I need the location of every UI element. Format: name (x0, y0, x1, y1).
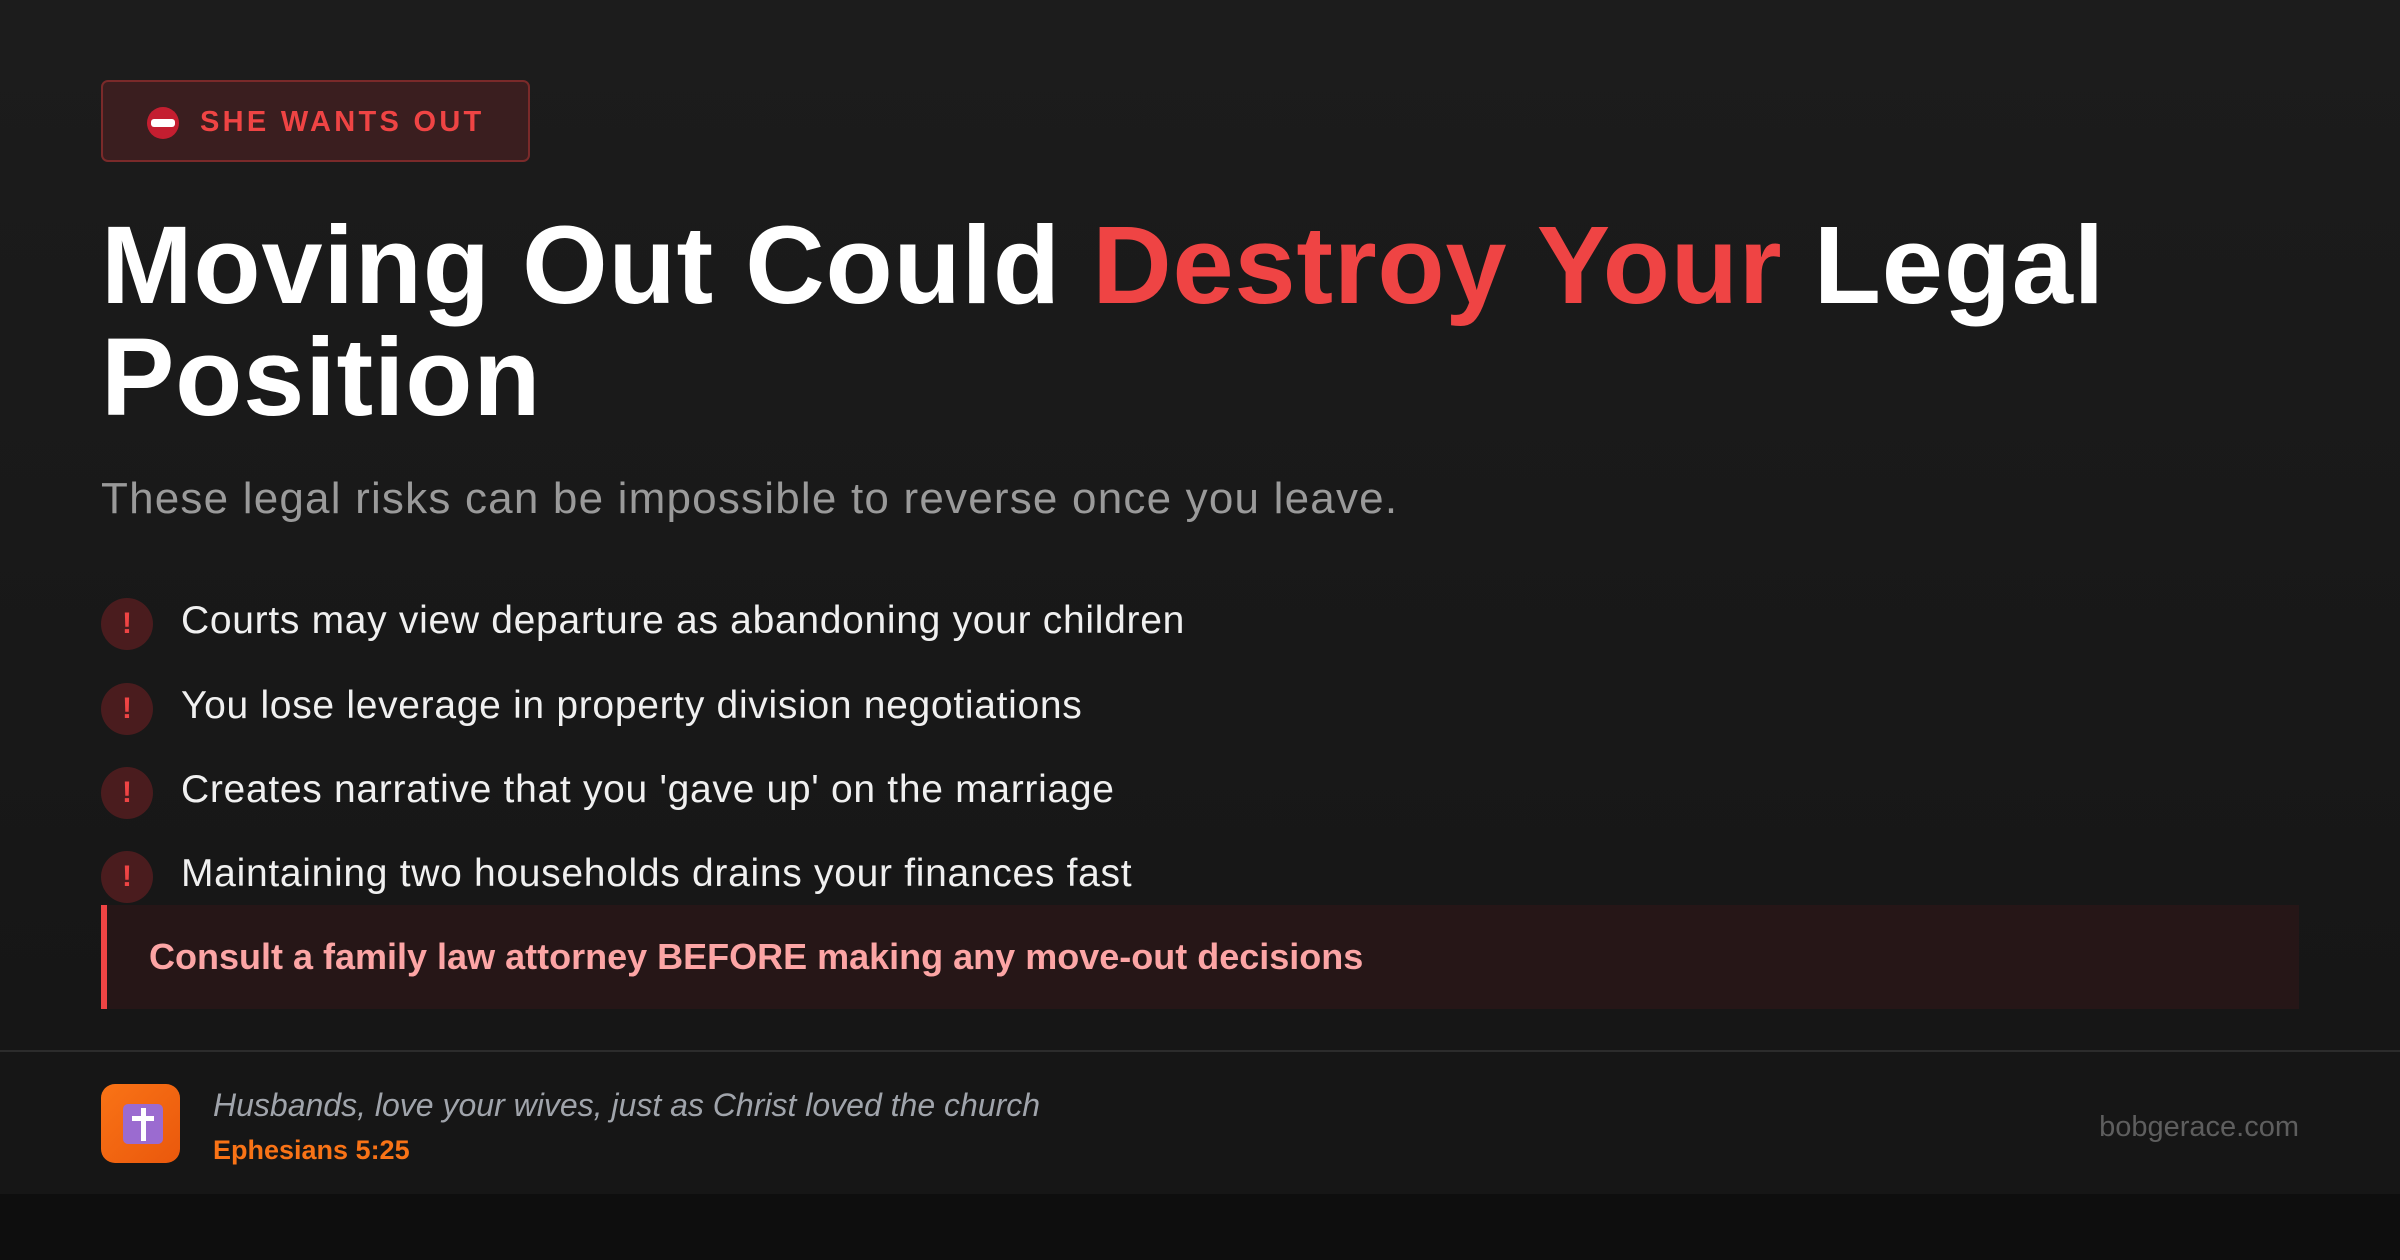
bullet 4: ! (122, 860, 132, 893)
bullet 1: Courts may view departure as abandoning your children (181, 599, 1185, 642)
bullet 3: ! (122, 776, 132, 809)
subtitle: These legal risks can be impossible to reverse once you leave. (101, 474, 1398, 523)
bullet 2: You lose leverage in property division negotiations (181, 684, 1082, 727)
callout (101, 905, 2299, 1009)
bullet 4: Maintaining two households drains your finances fast (181, 852, 1132, 895)
bullet 2: ! (122, 692, 132, 725)
site: bobgerace.com (2099, 1111, 2299, 1143)
badge (101, 80, 530, 162)
footer (0, 1050, 2400, 1194)
callout: Consult a family law attorney BEFORE making any move-out decisions (149, 936, 1363, 977)
title: Moving Out Could Destroy Your Legal (101, 204, 2105, 327)
title: Position (101, 316, 541, 439)
bullet 3: Creates narrative that you 'gave up' on the marriage (181, 768, 1115, 811)
reference: Ephesians 5:25 (213, 1135, 410, 1165)
bullet 1: ! (122, 607, 132, 640)
badge text: SHE WANTS OUT (200, 106, 485, 138)
title (101, 204, 2105, 439)
quote: Husbands, love your wives, just as Christ loved the church (213, 1087, 1040, 1123)
icon: no entry (147, 107, 179, 139)
icon: cross (101, 1084, 180, 1163)
